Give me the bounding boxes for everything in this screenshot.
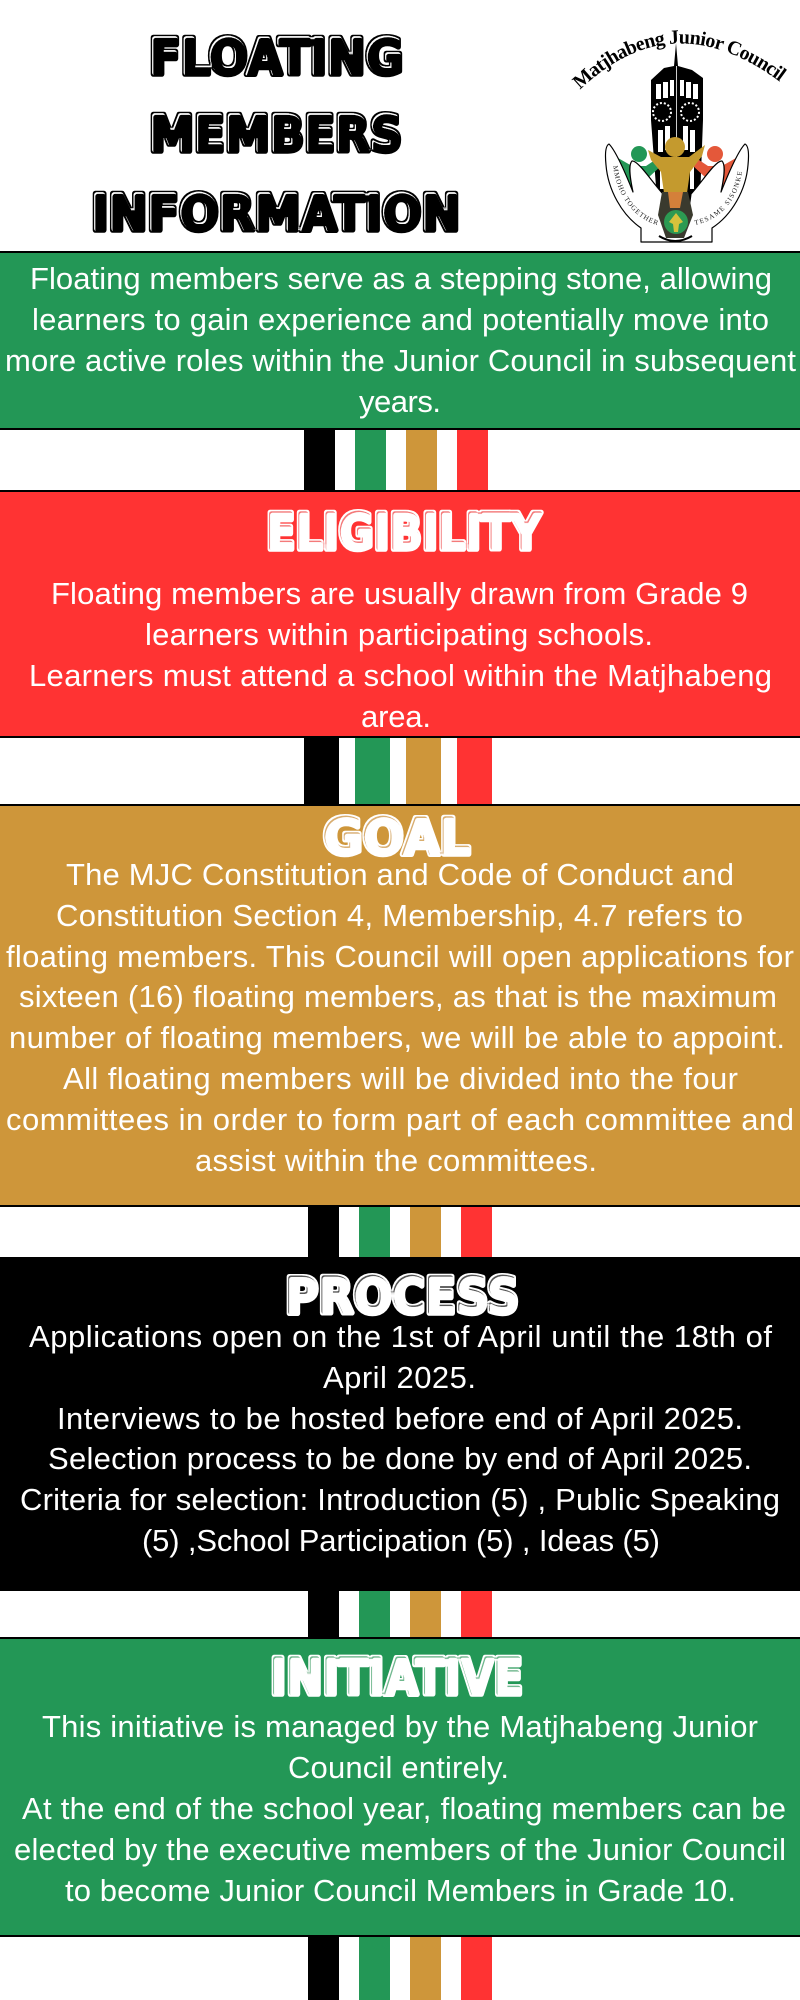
goal text: number of floating members, we will be able to appoint.: [9, 1020, 785, 1055]
logo gold figure: [648, 137, 705, 193]
colour stripes 3: [308, 1207, 492, 1257]
colour stripes 4: [308, 1591, 492, 1638]
title: MEMBERS: [149, 105, 402, 163]
heading: eligibility: ELIGIBILITY: [266, 503, 542, 561]
panel: eligibility: [0, 490, 800, 738]
eligibility text: learners within participating schools.: [145, 617, 653, 652]
eligibility text: Learners must attend a school within the Matjhabeng: [29, 658, 772, 693]
colour stripes 1: [304, 430, 488, 490]
intro text: learners to gain experience and potentially move into: [32, 302, 769, 337]
process text: Criteria for selection: Introduction (5) , Public Speaking: [20, 1482, 780, 1517]
initiative text: Council entirely.: [288, 1750, 509, 1785]
logo clock tower: [651, 43, 703, 200]
colour stripes 2: [304, 738, 492, 804]
title: INFORMATION: [91, 184, 460, 242]
logo: Matjhabeng Junior Council: [572, 30, 787, 243]
logo motto: TESAME SISONKE: [694, 172, 742, 225]
logo hands: [605, 144, 749, 242]
intro text: more active roles within the Junior Council in subsequent: [5, 343, 796, 378]
process text: Interviews to be hosted before end of April 2025.: [57, 1401, 743, 1436]
process text: April 2025.: [323, 1360, 476, 1395]
eligibility text: Floating members are usually drawn from Grade 9: [51, 576, 748, 611]
logo red figure: [692, 146, 736, 198]
initiative text: to become Junior Council Members in Grade 10.: [65, 1873, 736, 1908]
goal text: All floating members will be divided into the four: [63, 1061, 738, 1096]
initiative text: elected by the executive members of the Junior Council: [14, 1832, 786, 1867]
heading: goal: GOAL: [323, 808, 470, 866]
panel: process: [0, 1257, 800, 1591]
panel: goal: [0, 804, 800, 1207]
goal text: [6, 857, 794, 1178]
intro text: [5, 261, 796, 419]
colour stripes 5: [308, 1937, 492, 2000]
intro text: years.: [359, 384, 441, 419]
logo crest: [658, 192, 693, 241]
title: FLOATING: [149, 28, 403, 86]
goal text: The MJC Constitution and Code of Conduct and: [66, 857, 734, 892]
process text: Applications open on the 1st of April until the 18th of: [29, 1319, 772, 1354]
intro text: Floating members serve as a stepping stone, allowing: [30, 261, 772, 296]
panel: initiative: [0, 1637, 800, 1937]
panel: intro: [0, 251, 800, 430]
goal text: committees in order to form part of each committee and: [6, 1102, 794, 1137]
goal text: Constitution Section 4, Membership, 4.7 refers to: [56, 898, 743, 933]
process text: (5) ,School Participation (5) , Ideas (5): [142, 1523, 660, 1558]
initiative text: This initiative is managed by the Matjhabeng Junior: [42, 1709, 758, 1744]
logo arc text: Matjhabeng Junior Council: [572, 30, 787, 90]
initiative text: [14, 1709, 786, 1908]
initiative text: At the end of the school year, floating members can be: [22, 1791, 786, 1826]
goal text: assist within the committees.: [195, 1143, 597, 1178]
eligibility text: [29, 576, 772, 734]
logo motto: MMOHO TOGETHER: [613, 166, 658, 226]
heading: initiative: INITIATIVE: [270, 1648, 523, 1706]
goal text: sixteen (16) floating members, as that is the maximum: [19, 979, 777, 1014]
eligibility text: area.: [361, 699, 431, 734]
process text: Selection process to be done by end of April 2025.: [48, 1441, 752, 1476]
title: [91, 28, 460, 242]
logo green figure: [618, 146, 662, 198]
goal text: floating members. This Council will open applications for: [6, 939, 794, 974]
process text: [20, 1319, 780, 1558]
logo motto: [613, 166, 742, 226]
heading: process: PROCESS: [285, 1267, 519, 1325]
